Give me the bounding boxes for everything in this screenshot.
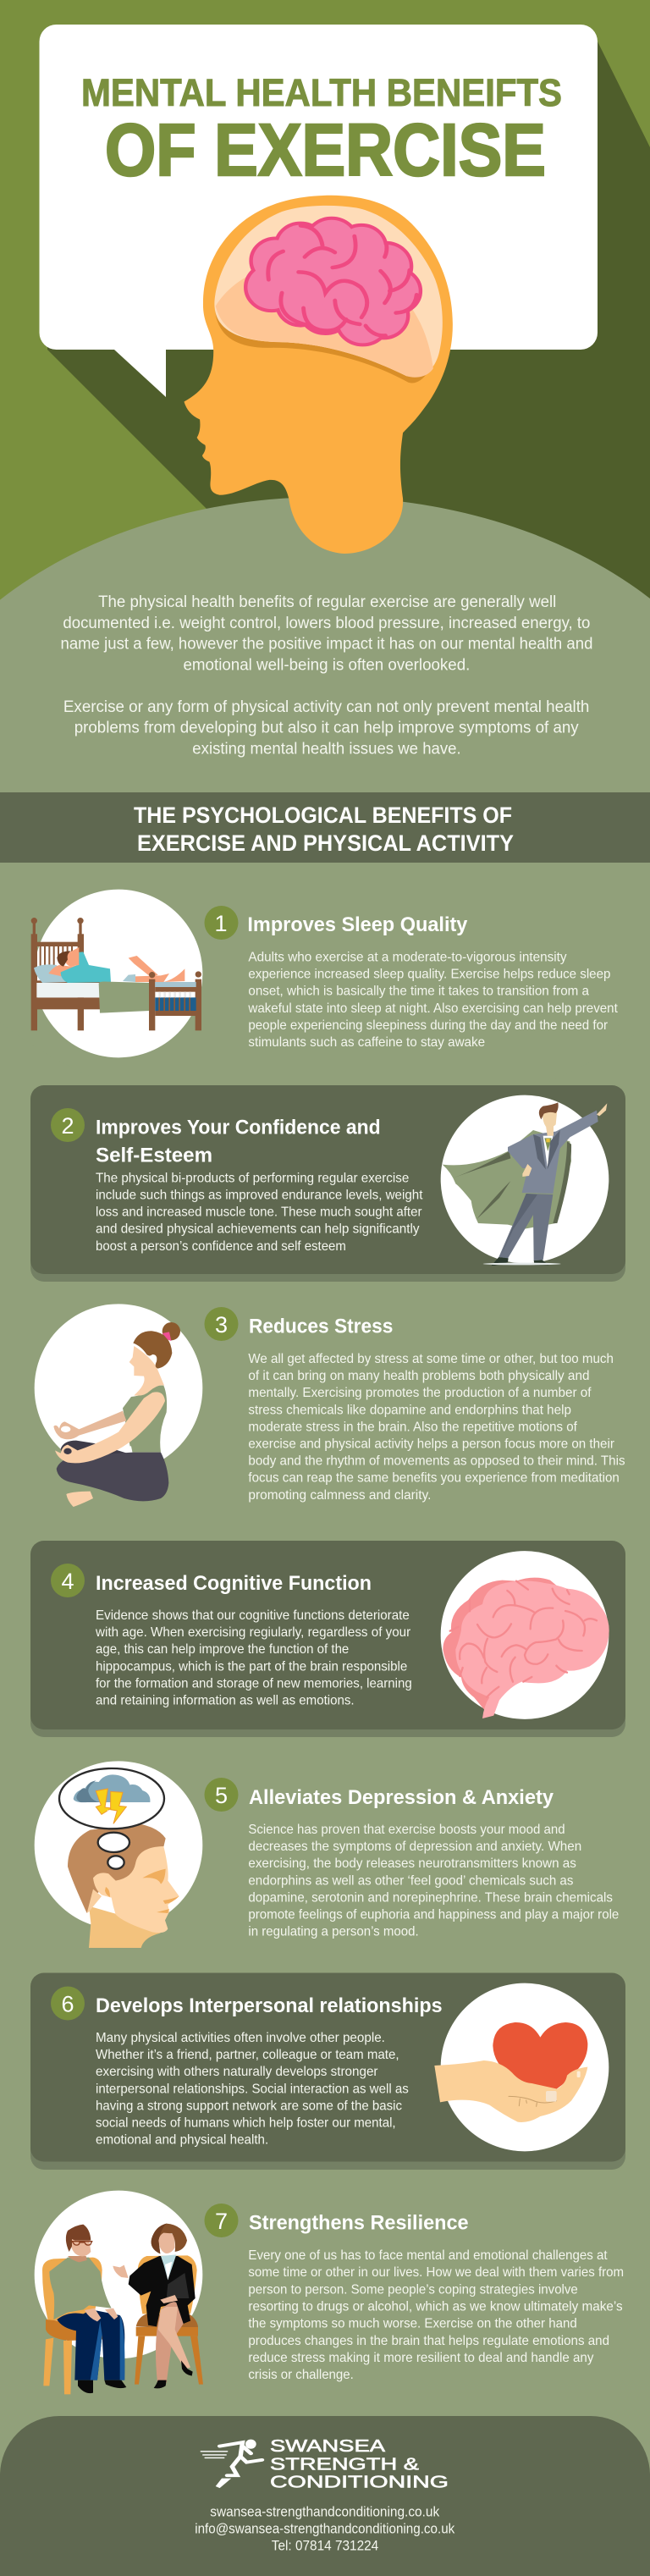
intro text: existing mental health issues we have. xyxy=(192,741,461,758)
body text 7: the symptoms so much worse. Exercise on the other hand xyxy=(248,2317,577,2331)
heading 2: Improves Your Confidence and xyxy=(96,1116,381,1139)
body text 6: exercising with others naturally develops stronger xyxy=(96,2065,378,2079)
number badge 1 xyxy=(205,906,239,940)
number badge 4: 4 xyxy=(61,1569,74,1594)
intro text: The physical health benefits of regular exercise are generally well xyxy=(98,593,556,611)
number badge 2 xyxy=(51,1108,85,1142)
header green background xyxy=(0,0,650,643)
icon: man with storm thought xyxy=(35,1761,202,1948)
body text 3: stress chemicals like dopamine and endorphins that help xyxy=(248,1403,571,1417)
body text 1 xyxy=(247,950,618,1050)
heading 2 xyxy=(96,1116,381,1167)
heading 4: Increased Cognitive Function xyxy=(96,1572,372,1595)
logo wordmark: CONDITIONING xyxy=(270,2473,449,2491)
icon: brain xyxy=(441,1551,609,1719)
icon: man in bed xyxy=(31,890,202,1057)
body text 6: Whether it’s a friend, partner, colleague or team mate, xyxy=(96,2048,399,2062)
number badge 3: 3 xyxy=(215,1312,228,1338)
body text 1: people experiencing sleepiness during the day and the need for xyxy=(248,1018,609,1033)
long bubble shadow xyxy=(47,41,650,643)
body text 1: Adults who exercise at a moderate-to-vigorous intensity xyxy=(248,950,567,965)
body text 5: Science has proven that exercise boosts your mood and xyxy=(248,1823,565,1837)
intro text: problems from developing but also it can help improve symptoms of any xyxy=(74,720,579,737)
panel: 2 confidence card xyxy=(30,1085,625,1282)
number badge 5 xyxy=(205,1778,239,1812)
section band heading: EXERCISE AND PHYSICAL ACTIVITY xyxy=(137,830,514,856)
logo wordmark: SWANSEA xyxy=(270,2437,386,2456)
body text 3: focus can reap the same benefits you experience from meditation xyxy=(248,1471,620,1486)
section band heading: THE PSYCHOLOGICAL BENEFITS OF xyxy=(134,803,512,828)
body text 3: mentally. Exercising promotes the production of a number of xyxy=(248,1386,592,1400)
body text 3: of it can bring on many health problems both physically and xyxy=(248,1369,589,1383)
body text 7: some time or other in our lives. How we deal with them varies from xyxy=(248,2265,624,2280)
panel: 3 reduces stress xyxy=(35,1304,625,1507)
body text 7: person to person. Some people’s coping strategies involve xyxy=(248,2282,578,2297)
contact details: swansea-strengthandconditioning.co.uk xyxy=(210,2504,440,2520)
body text 6: emotional and physical health. xyxy=(96,2133,268,2148)
intro text xyxy=(61,593,592,758)
body text 4: Evidence shows that our cognitive functions deteriorate xyxy=(96,1608,410,1623)
body text 5: dopamine, serotonin and norepinephrine. These brain chemicals xyxy=(248,1890,613,1905)
body text 3: moderate stress in the brain. Also the repetitive motions of xyxy=(248,1420,577,1434)
panel: 7 strengthens resilience xyxy=(35,2191,624,2394)
body text 6: having a strong support network are some of the basic xyxy=(96,2099,402,2113)
logo wordmark: STRENGTH & xyxy=(270,2455,420,2474)
body text 2 xyxy=(96,1171,423,1254)
body text 7: resorting to drugs or alcohol, which as we know ultimately make’s xyxy=(248,2299,623,2314)
title: MENTAL HEALTH BENEIFTS xyxy=(81,71,562,114)
number badge 6: 6 xyxy=(61,1991,74,2016)
number badge 6 xyxy=(51,1986,85,2020)
body text 5: endorphins as well as other ‘feel good’ chemicals such as xyxy=(248,1873,573,1888)
heading 6: Develops Interpersonal relationships xyxy=(96,1994,443,2017)
body text 4: hippocampus, which is the part of the brain responsible xyxy=(96,1659,407,1674)
contact details: Tel: 07814 731224 xyxy=(272,2538,378,2553)
body text 3 xyxy=(248,1352,625,1503)
heading 5: Alleviates Depression & Anxiety xyxy=(249,1786,554,1809)
title xyxy=(81,71,562,191)
panel: footer xyxy=(0,2416,650,2576)
icon: head with brain xyxy=(184,196,453,554)
icon: woman meditating xyxy=(35,1304,202,1507)
number badge 7 xyxy=(205,2204,239,2237)
title: OF EXERCISE xyxy=(105,109,546,191)
body text 2: The physical bi-products of performing regular exercise xyxy=(96,1171,409,1185)
body text 4: for the formation and storage of new memories, learning xyxy=(96,1676,412,1691)
body text 7 xyxy=(248,2248,624,2382)
body text 6: interpersonal relationships. Social interaction as well as xyxy=(96,2082,409,2096)
body text 2: boost a person’s confidence and self esteem xyxy=(96,1239,346,1254)
body text 4: with age. When exercising regiularly, regardless of your xyxy=(95,1625,411,1640)
intro text: Exercise or any form of physical activity can not only prevent mental health xyxy=(63,698,589,716)
body text 7: Every one of us has to face mental and emotional challenges at xyxy=(248,2248,608,2263)
panel: 6 interpersonal relationships card xyxy=(30,1972,625,2170)
body text 6 xyxy=(96,2031,409,2148)
body text 5: promote feelings of euphoria and happiness and play a major role xyxy=(248,1908,619,1922)
number badge 5: 5 xyxy=(215,1783,228,1808)
body text 1: stimulants such as caffeine to stay awake xyxy=(248,1035,485,1050)
body text 2: loss and increased muscle tone. These much sought after xyxy=(96,1205,422,1220)
body text 3: exercise and physical activity helps a person focus more on their xyxy=(248,1437,615,1451)
body text 4 xyxy=(95,1608,412,1708)
panel: 1 sleep quality xyxy=(31,890,618,1057)
heading 2: Self-Esteem xyxy=(96,1145,212,1167)
speech bubble xyxy=(39,25,598,397)
sage hill xyxy=(0,497,650,1125)
contact details xyxy=(195,2504,455,2553)
body text 7: produces changes in the brain that helps regulate emotions and xyxy=(248,2334,609,2348)
number badge 1: 1 xyxy=(214,911,228,936)
number badge 2: 2 xyxy=(61,1113,74,1139)
body text 6: social needs of humans which help foster our mental, xyxy=(96,2116,396,2130)
body text 5 xyxy=(248,1823,619,1939)
icon: businessman superhero xyxy=(441,1095,609,1266)
logo wordmark xyxy=(270,2437,449,2491)
body text 3: promoting calmness and clarity. xyxy=(248,1488,431,1503)
intro text: name just a few, however the positive impact it has on our mental health and xyxy=(61,635,592,654)
body text 2: include such things as improved endurance levels, weight xyxy=(96,1189,423,1202)
icon: hand holding heart xyxy=(434,1983,609,2151)
panel: 5 depression and anxiety xyxy=(35,1761,619,1948)
intro text: documented i.e. weight control, lowers blood pressure, increased energy, to xyxy=(63,615,590,632)
body text 3: We all get affected by stress at some time or other, but too much xyxy=(248,1352,614,1366)
icon: running man logo xyxy=(201,2440,262,2488)
panel: 4 cognitive function card xyxy=(30,1541,625,1737)
body text 5: in regulating a person’s mood. xyxy=(248,1925,419,1939)
body text 6: Many physical activities often involve other people. xyxy=(96,2031,385,2045)
body text 7: reduce stress making it more resilient to deal and handle any xyxy=(248,2351,593,2365)
icon: couple on chairs xyxy=(35,2191,203,2394)
heading 3: Reduces Stress xyxy=(249,1315,393,1338)
body text 1: wakeful state into sleep at night. Also exercising can help prevent xyxy=(247,1001,618,1016)
body text 5: exercising, the body releases neurotransmitters known as xyxy=(248,1856,576,1871)
body text 2: and desired physical achievements can help significantly xyxy=(96,1222,420,1237)
number badge 7: 7 xyxy=(215,2209,228,2234)
body text 4: and retaining information as well as emotions. xyxy=(96,1693,355,1708)
body text 1: experience increased sleep quality. Exercise helps reduce sleep xyxy=(248,968,610,982)
body text 7: crisis or challenge. xyxy=(248,2368,354,2382)
icon: pink brain xyxy=(247,220,419,343)
intro text: emotional well-being is often overlooked. xyxy=(183,656,470,674)
body text 3: body and the rhythm of movements as opposed to their mind. This xyxy=(248,1454,625,1469)
number badge 3 xyxy=(205,1307,239,1341)
body text 5: decreases the symptoms of depression and anxiety. When xyxy=(248,1840,581,1854)
body text 4: age, this can help improve the function of the xyxy=(96,1642,349,1657)
section band heading xyxy=(0,792,650,863)
body text 1: onset, which is basically the time it takes to transition from a xyxy=(248,985,589,999)
heading 7: Strengthens Resilience xyxy=(249,2211,469,2234)
number badge 4 xyxy=(51,1564,85,1597)
contact details: info@swansea-strengthandconditioning.co.uk xyxy=(195,2520,455,2536)
heading 1: Improves Sleep Quality xyxy=(247,913,468,936)
